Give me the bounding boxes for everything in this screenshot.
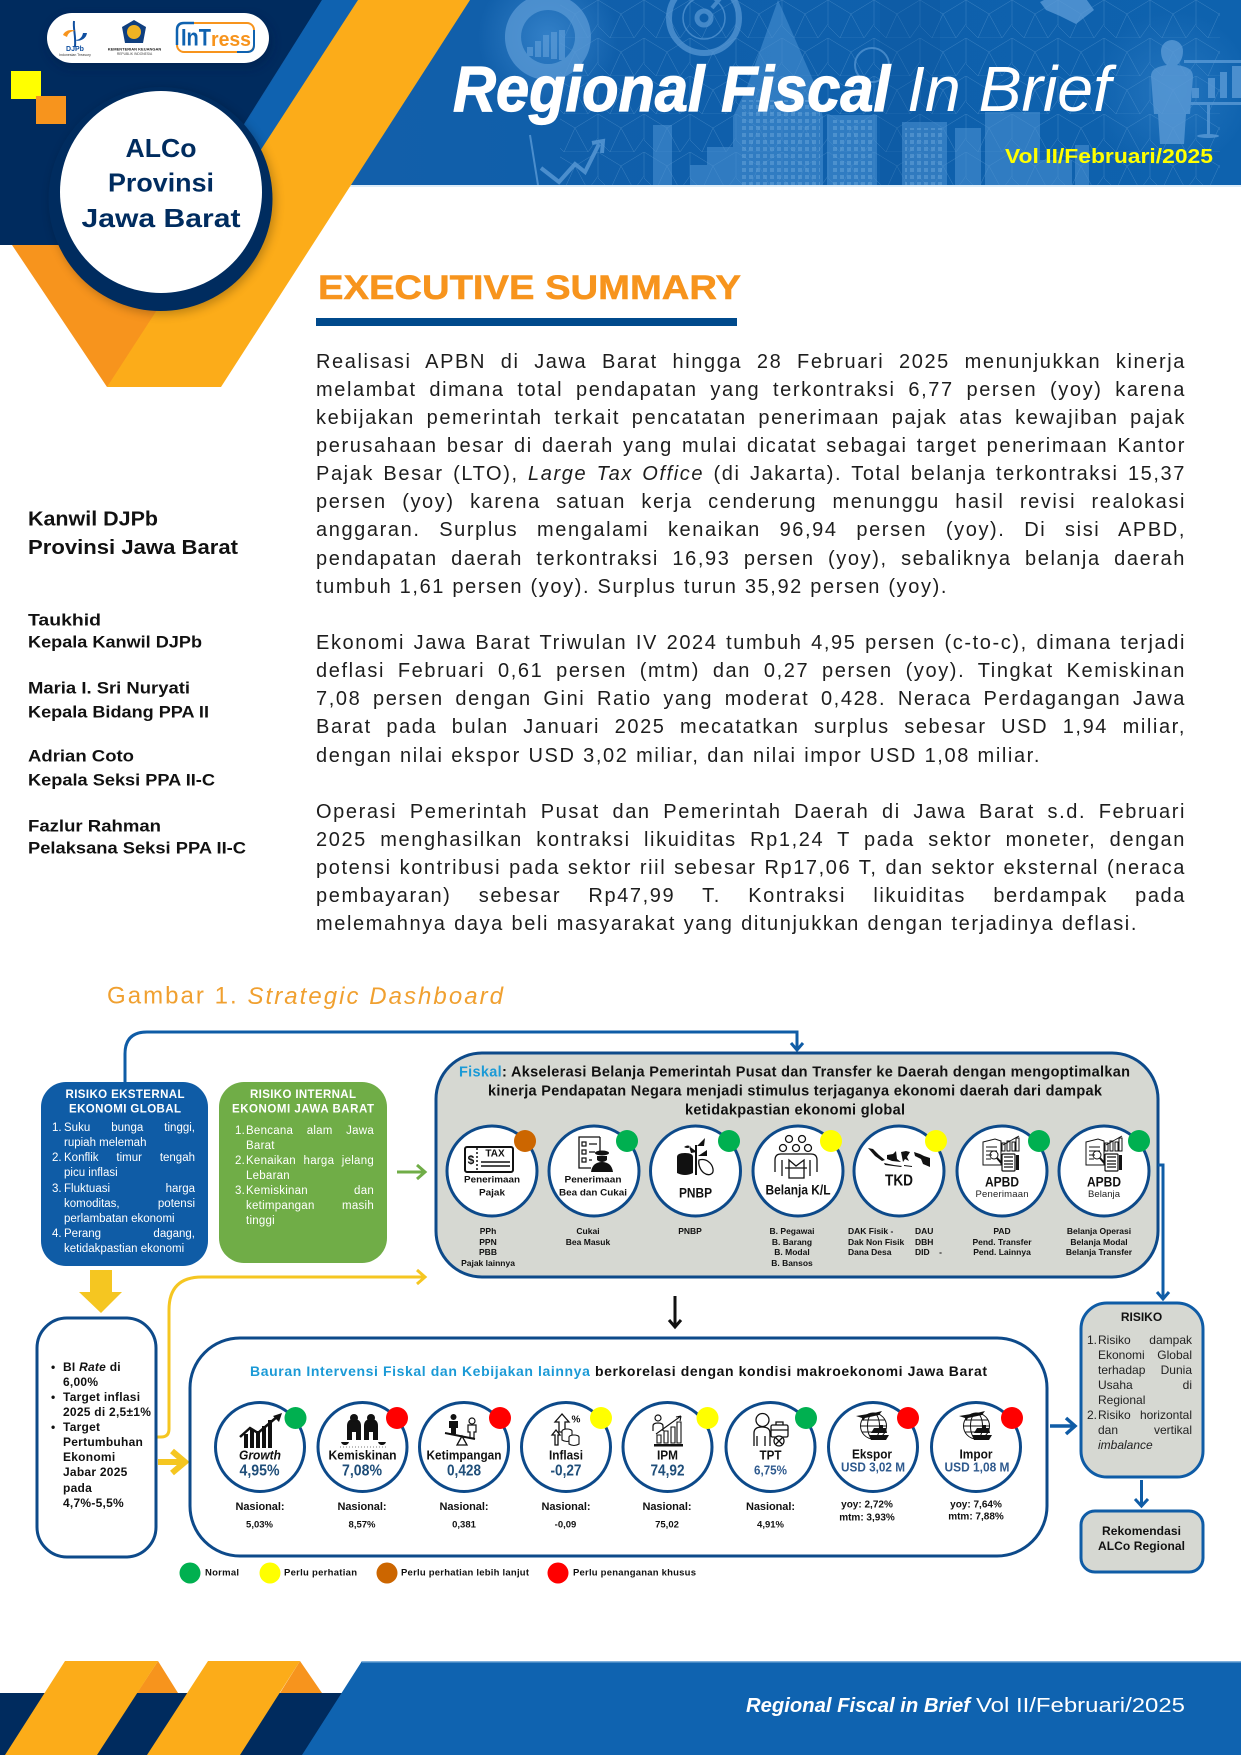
footer text: Regional Fiscal in Brief — [746, 1695, 972, 1717]
indicator: TPT — [726, 1402, 817, 1492]
sub-items list: Pend. Transfer — [972, 1237, 1032, 1247]
text: • — [51, 1360, 55, 1374]
indicator: bea cukai: Penerimaan — [564, 1174, 622, 1186]
header banner — [0, 0, 1241, 187]
legend: Perlu perhatian — [284, 1568, 357, 1578]
indicator: penerimaan pajak: Pajak — [479, 1188, 506, 1198]
sub-items list: B. Pegawai — [770, 1226, 814, 1236]
icon: DJPb logo — [59, 21, 91, 57]
text block: risiko eksternal list — [52, 1122, 196, 1255]
text block: risiko internal list: Lebaran — [246, 1170, 290, 1182]
indicator: ekspor: USD 3,02 M — [841, 1460, 905, 1474]
sub-items list: Cukai — [576, 1226, 600, 1236]
indicator: impor: Impor — [960, 1446, 992, 1462]
icon: InTress logo — [177, 23, 254, 52]
text block: executive summary body: pendapatan daerah terkontraksi 16,93 persen (yoy), sebaliknya belanja daerah — [316, 548, 1186, 570]
indicator: growth: 4,95% — [240, 1462, 280, 1480]
national comparison values: mtm: 7,88% — [948, 1512, 1004, 1522]
indicator: ketimpangan: 0,428 — [447, 1462, 481, 1480]
arrow: yellow down — [79, 1270, 122, 1313]
national comparison values: Nasional: — [746, 1501, 795, 1513]
arrow: policy to fiscal panel — [157, 1270, 425, 1437]
text block: executive summary body — [316, 351, 1186, 935]
text block: executive summary body: Ekonomi Jawa Barat Triwulan IV 2024 tumbuh 4,95 persen (c-to-c), dimana terjadi — [316, 632, 1186, 654]
panel: risiko eksternal: RISIKO EKSTERNAL — [66, 1089, 184, 1101]
arrow: external risk to fiscal panel — [125, 1032, 803, 1082]
text block: executive summary body: 2025 menghasilkan kontraksi likuiditas Rp1,24 T pada sektor moneter, dengan — [316, 829, 1186, 851]
national comparison values: Nasional: — [338, 1501, 386, 1513]
sub-items list: PAD — [993, 1226, 1011, 1236]
indicator: TKD: TKD — [885, 1172, 913, 1190]
footer text: Vol II/Februari/2025 — [976, 1695, 1185, 1717]
indicator: belanja K/L: Belanja K/L — [766, 1182, 830, 1198]
sub-items list: Bea Masuk — [566, 1237, 610, 1247]
author block: Kepala Kanwil DJPb — [28, 632, 202, 652]
text: • — [51, 1420, 55, 1434]
sub-items list: PBB — [479, 1247, 497, 1257]
national comparison values: Nasional: — [440, 1501, 488, 1513]
indicator: kemiskinan: 7,08% — [342, 1462, 382, 1480]
indicator: ketimpangan — [420, 1402, 511, 1492]
panel: fiskal — [436, 1053, 1158, 1277]
panel title — [459, 1064, 1130, 1118]
text block: executive summary body: Barat pada bulan Januari 2025 mecatatkan surplus sebesar USD 1,94 miliar, — [316, 716, 1186, 738]
national comparison values: Nasional: — [642, 1501, 692, 1513]
indicator: APBD penerimaan — [957, 1126, 1050, 1216]
text block: executive summary body: kebijakan pemerintah terkait pencatatan penerimaan pajak atas kewajiban pajak — [316, 407, 1186, 429]
text block: risiko eksternal list: rupiah melemah — [64, 1137, 146, 1149]
text block: risiko eksternal list: komoditas, potensi — [64, 1198, 195, 1210]
sub-items list: PPN — [479, 1237, 497, 1247]
author block: Pelaksana Seksi PPA II-C — [28, 838, 246, 858]
author block: Taukhid — [28, 610, 101, 630]
sub-items list: Belanja Operasi — [1067, 1226, 1131, 1236]
author block: Fazlur Rahman — [28, 816, 161, 836]
sub-items list: Pajak lainnya — [461, 1258, 515, 1268]
text block: risiko internal list: Bencana alam Jawa — [246, 1124, 374, 1136]
panel: risiko: RISIKO — [1121, 1310, 1162, 1324]
indicator: kemiskinan: Kemiskinan — [328, 1448, 397, 1462]
indicator: inflasi — [522, 1402, 612, 1492]
figure heading: Gambar 1. Strategic Dashboard — [107, 982, 504, 1010]
sub-items list: Dak Non Fisik — [848, 1237, 904, 1247]
panel: rekomendasi: ALCo Regional — [1098, 1539, 1185, 1553]
indicator: kemiskinan — [318, 1402, 408, 1492]
text: 4. — [52, 1228, 62, 1240]
text block: risiko internal list: Barat — [246, 1140, 275, 1152]
panel: risiko internal: EKONOMI JAWA BARAT — [232, 1104, 374, 1116]
text block: risiko list: Regional — [1098, 1393, 1145, 1407]
text block: risiko internal list — [235, 1124, 374, 1227]
indicator: APBD belanja: APBD — [1087, 1174, 1121, 1190]
text: 3. — [52, 1183, 62, 1195]
icon: InTress logo: ress — [211, 29, 251, 51]
indicator: APBD penerimaan: Penerimaan — [976, 1189, 1028, 1200]
indicator: TPT: TPT — [760, 1448, 782, 1462]
text block: executive summary body: tumbuh 1,61 persen (yoy). Surplus turun 35,92 persen (yoy). — [316, 576, 948, 598]
text: 2. — [1087, 1408, 1097, 1422]
indicator: APBD belanja: Belanja — [1088, 1189, 1121, 1200]
text block: risiko eksternal list: Perang dagang, — [64, 1228, 195, 1240]
text block: risiko eksternal list: Fluktuasi harga — [64, 1183, 195, 1195]
arrow: fiscal to risiko — [1157, 1165, 1169, 1299]
icon: Kemenkeu logo: REPUBLIK INDONESIA — [117, 52, 153, 56]
indicator: ekspor — [828, 1402, 919, 1492]
title: In Brief — [907, 53, 1117, 125]
sub-items list: DBH — [915, 1237, 933, 1247]
legend: Perlu perhatian lebih lanjut — [401, 1568, 530, 1578]
author block — [28, 508, 246, 858]
national comparison values: -0,09 — [555, 1520, 576, 1530]
badge: ALCo Provinsi Jawa Barat: ALCo — [126, 133, 196, 163]
legend — [180, 1562, 696, 1584]
national comparison values: yoy: 7,64% — [950, 1500, 1002, 1510]
national comparison values: mtm: 3,93% — [839, 1512, 895, 1524]
icon: Kemenkeu logo: KEMENTERIAN KEUANGAN — [108, 46, 161, 52]
badge: ALCo Provinsi Jawa Barat: Jawa Barat — [82, 203, 241, 233]
sub-items list: DAU — [915, 1226, 933, 1236]
text block: risiko eksternal list: perlambatan ekonomi — [64, 1213, 175, 1225]
text block: risiko list: Risiko horizontal — [1098, 1408, 1192, 1422]
sub-items list: PPh — [480, 1226, 496, 1236]
text: 1. — [1087, 1332, 1097, 1346]
icon: DJPb logo: DJPb — [66, 46, 84, 53]
indicator: PNBP: PNBP — [679, 1186, 712, 1200]
indicator: penerimaan pajak: Penerimaan — [464, 1174, 520, 1186]
heading: executive summary — [316, 269, 741, 326]
arrow: fiscal to macro — [669, 1296, 681, 1327]
national comparison values: 5,03% — [246, 1520, 274, 1530]
panel: rekomendasi: Rekomendasi — [1102, 1524, 1181, 1538]
text block: risiko list: imbalance — [1098, 1438, 1153, 1452]
indicator: PNBP — [650, 1126, 740, 1216]
sub-items list: Pend. Lainnya — [973, 1247, 1031, 1257]
text block: kebijakan list: 4,7%-5,5% — [63, 1496, 124, 1510]
text block: kebijakan list: Target — [63, 1420, 100, 1434]
badge: ALCo Provinsi Jawa Barat — [48, 87, 275, 314]
indicator: penerimaan pajak: TAX — [485, 1148, 505, 1160]
national comparison values: Nasional: — [542, 1501, 590, 1513]
text block: risiko list: dan vertikal — [1098, 1423, 1192, 1437]
text block: risiko list — [1087, 1332, 1192, 1452]
author block: Provinsi Jawa Barat — [28, 537, 238, 559]
text block: risiko internal list: Kenaikan harga jelang — [246, 1155, 374, 1167]
indicator: impor — [932, 1402, 1023, 1492]
author block: Kepala Bidang PPA II — [28, 702, 209, 722]
panel: rekomendasi — [1081, 1511, 1203, 1572]
header diagonal shapes — [0, 0, 470, 387]
indicator: TPT: 6,75% — [754, 1462, 787, 1478]
national comparison values: yoy: 2,72% — [841, 1500, 893, 1510]
icon: DJPb logo: Indonesian Treasury — [59, 53, 91, 57]
text block: executive summary body: potensi kontribusi pada sektor riil sebesar Rp17,06 T, dan sektor eksternal (neraca — [316, 857, 1186, 879]
text block: executive summary body: Operasi Pemerintah Pusat dan Pemerintah Daerah di Jawa Barat s.d. Februari — [316, 801, 1186, 823]
text block: risiko eksternal list: Suku bunga tinggi, — [64, 1122, 195, 1134]
arrow: risiko to rekomendasi — [1135, 1480, 1148, 1506]
indicator: IPM: 74,92 — [650, 1462, 684, 1480]
text: 3. — [235, 1185, 245, 1197]
heading: executive summary: EXECUTIVE SUMMARY — [318, 269, 741, 307]
text block: risiko eksternal list: Konflik timur tengah — [64, 1152, 195, 1164]
sub-items list: DID - — [915, 1247, 942, 1257]
national comparison values: 4,91% — [757, 1520, 785, 1530]
text block: risiko list: Ekonomi Global — [1098, 1348, 1192, 1362]
sub-items list: Belanja Modal — [1070, 1237, 1128, 1247]
panel: risiko eksternal — [41, 1082, 208, 1266]
indicator: IPM: IPM — [657, 1448, 678, 1462]
legend: Perlu penanganan khusus — [573, 1568, 696, 1578]
text block: kebijakan list: Jabar 2025 — [63, 1465, 128, 1479]
text block: executive summary body: pembayaran) sebesar Rp47,99 T. Kontraksi likuiditas berdampak pada — [316, 885, 1186, 907]
indicator: inflasi: -0,27 — [550, 1462, 582, 1480]
author block: Maria I. Sri Nuryati — [28, 678, 190, 698]
text block: risiko list: Usaha di — [1098, 1378, 1192, 1392]
text block: risiko internal list: Kemiskinan dan — [246, 1185, 374, 1197]
panel: risiko — [1081, 1303, 1203, 1477]
legend: Normal — [205, 1568, 239, 1578]
text block: executive summary body: Realisasi APBN di Jawa Barat hingga 28 Februari 2025 menunjukkan kinerja — [316, 351, 1186, 373]
text block: executive summary body: 7,08 persen dengan Gini Ratio yang moderat 0,428. Neraca Perdagangan Jawa — [316, 688, 1186, 710]
national comparison values: Nasional: — [236, 1501, 284, 1513]
panel: risiko internal — [219, 1082, 387, 1263]
text block: kebijakan list: Ekonomi — [63, 1450, 115, 1464]
text block: risiko eksternal list: picu inflasi — [64, 1167, 118, 1179]
panel: bauran intervensi — [190, 1338, 1047, 1556]
text block: executive summary body: melemahnya daya beli masyarakat yang ditunjukkan dengan terjadinya deflasi. — [316, 913, 1138, 935]
text block: risiko list: Risiko dampak — [1098, 1332, 1192, 1346]
panel title: ketidakpastian ekonomi global — [685, 1102, 905, 1118]
text block: executive summary body: Pajak Besar (LTO), Large Tax Office (di Jakarta). Total belanja terkontraksi 15,37 — [316, 463, 1186, 485]
author block: Kanwil DJPb — [28, 508, 158, 530]
text block: executive summary body: dengan nilai ekspor USD 3,02 miliar, dan nilai impor USD 1,08 miliar. — [316, 745, 1041, 767]
indicator: bea cukai — [549, 1126, 639, 1216]
panel: risiko eksternal: EKONOMI GLOBAL — [69, 1104, 181, 1116]
sub-items list: DAK Fisik - — [848, 1226, 894, 1236]
indicator: impor: USD 1,08 M — [944, 1460, 1010, 1474]
indicator: ekspor: Ekspor — [852, 1446, 892, 1462]
sub-items list: B. Barang — [772, 1237, 812, 1247]
indicator: IPM — [623, 1402, 718, 1492]
indicator: bea cukai: Bea dan Cukai — [559, 1188, 627, 1198]
text block: executive summary body: anggaran. Surplus mengalami kenaikan 96,94 persen (yoy). Di sisi APBD, — [316, 519, 1186, 541]
author block: Kepala Seksi PPA II-C — [28, 770, 215, 790]
panel title: Fiskal: Akselerasi Belanja Pemerintah Pusat dan Transfer ke Daerah dengan mengoptimalkan — [459, 1064, 1130, 1080]
sub-items list: Dana Desa — [848, 1247, 892, 1257]
sub-items list: B. Modal — [774, 1247, 810, 1257]
text block: kebijakan list: pada — [63, 1481, 92, 1495]
panel: risiko internal: RISIKO INTERNAL — [250, 1089, 356, 1101]
text block: kebijakan list — [51, 1360, 151, 1510]
arrow: macro to risiko — [1050, 1418, 1075, 1434]
footer text — [746, 1695, 1185, 1717]
text block: executive summary body: persen (yoy) karena satuan kerja cenderung menunggu hasil revisi realokasi — [316, 491, 1186, 513]
national comparison values: 0,381 — [452, 1520, 477, 1530]
arrow: internal risk to fiscal panel — [397, 1165, 425, 1179]
author block: Adrian Coto — [28, 746, 134, 766]
national comparison values: 8,57% — [349, 1520, 376, 1530]
text block: risiko internal list: ketimpangan masih — [246, 1200, 374, 1212]
footer banner — [0, 1661, 1241, 1755]
indicator: growth: Growth — [239, 1448, 281, 1462]
text: • — [51, 1390, 55, 1404]
panel title: kinerja Pendapatan Negara menjadi stimulus terjaganya ekonomi daerah dari dampak — [488, 1084, 1103, 1100]
text block: executive summary body: perusahaan besar di daerah yang mulai dicatat sebagai target penerimaan Kantor — [316, 435, 1186, 457]
text block: executive summary body: melambat dimana total pendapatan yang terkontraksi 6,77 persen (yoy) karena — [316, 379, 1186, 401]
sub-items list: B. Bansos — [771, 1258, 813, 1268]
sub-items list — [461, 1226, 1133, 1268]
sub-items list: Belanja Transfer — [1066, 1247, 1133, 1257]
text: 1. — [52, 1122, 62, 1134]
indicator: ketimpangan: Ketimpangan — [426, 1448, 502, 1462]
text block: kebijakan list: Pertumbuhan — [63, 1435, 143, 1449]
text block: risiko internal list: tinggi — [246, 1215, 275, 1227]
decorative squares — [11, 71, 66, 124]
arrow: policy to macro panel — [158, 1451, 185, 1473]
icon: InTress logo: InT — [181, 24, 211, 52]
national comparison values: 75,02 — [655, 1520, 679, 1530]
text: 1. — [235, 1124, 245, 1136]
text: 2. — [52, 1152, 62, 1164]
indicator: APBD penerimaan: APBD — [985, 1174, 1019, 1190]
indicator: APBD belanja — [1059, 1126, 1150, 1216]
icon: Kemenkeu logo — [108, 20, 161, 56]
text block: kebijakan list: BI Rate di — [63, 1360, 121, 1374]
indicator: growth — [216, 1402, 306, 1492]
logo pill — [47, 13, 271, 67]
indicator: inflasi: % — [572, 1414, 581, 1426]
edition label: Vol II/Februari/2025 — [1005, 146, 1213, 168]
sub-items list: PNBP — [678, 1226, 702, 1236]
text block: risiko list: terhadap Dunia — [1098, 1363, 1192, 1377]
text block: kebijakan list: 2025 di 2,5±1% — [63, 1405, 151, 1419]
text block: risiko eksternal list: ketidakpastian ekonomi — [64, 1243, 184, 1255]
indicator: TKD — [854, 1126, 947, 1216]
panel: kebijakan — [37, 1318, 156, 1557]
title: Regional Fiscal — [453, 53, 891, 125]
text block: executive summary body: deflasi Februari 0,61 persen (mtm) dan 0,27 persen (yoy). Tingkat Kemiskinan — [316, 660, 1186, 682]
indicator: inflasi: Inflasi — [549, 1448, 583, 1462]
national comparison values — [236, 1500, 1004, 1530]
panel title: Bauran Intervensi Fiskal dan Kebijakan lainnya berkorelasi dengan kondisi makroekonomi Jawa Barat — [250, 1363, 987, 1379]
badge: ALCo Provinsi Jawa Barat: Provinsi — [108, 168, 214, 198]
text: 2. — [235, 1155, 245, 1167]
text block: kebijakan list: Target inflasi — [63, 1390, 140, 1404]
indicator: penerimaan pajak — [447, 1126, 537, 1216]
text block: kebijakan list: 6,00% — [63, 1375, 98, 1389]
indicator: penerimaan pajak: $ — [468, 1153, 475, 1167]
indicator: belanja K/L — [753, 1126, 843, 1216]
